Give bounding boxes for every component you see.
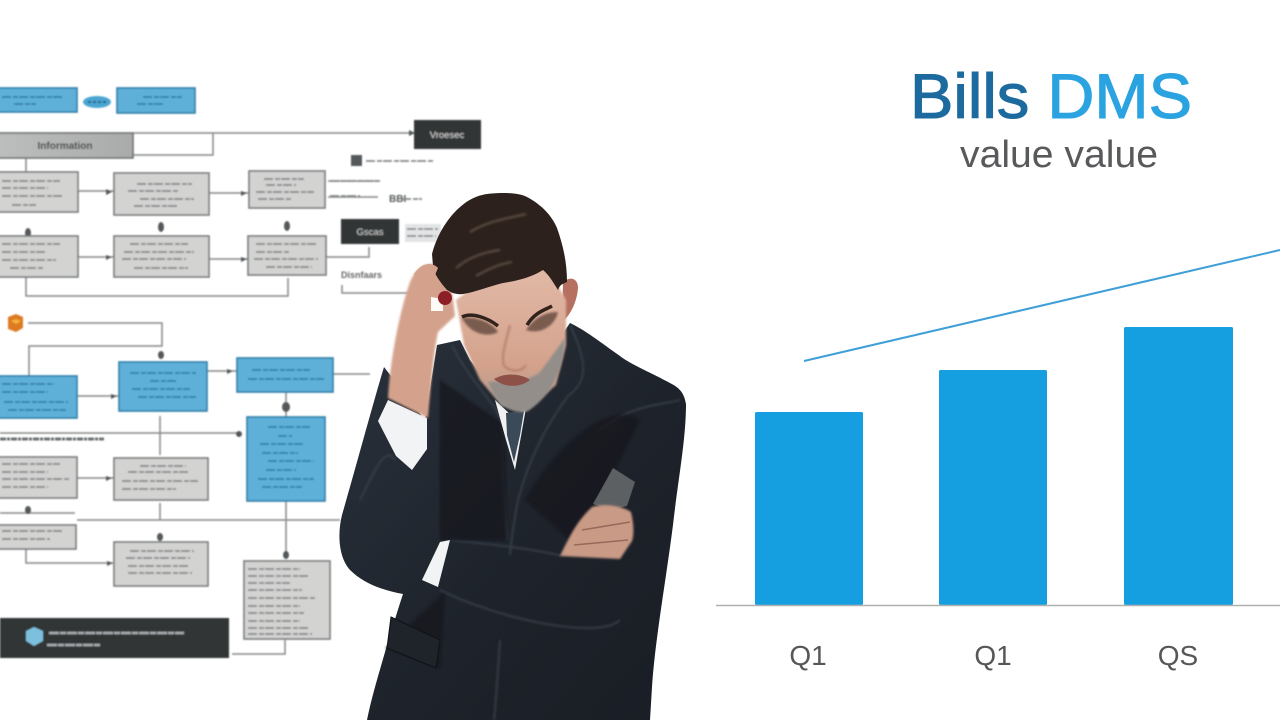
blue box top right <box>117 88 195 113</box>
dark box: status: Gscas <box>357 227 384 238</box>
flow box row 2 column 2 <box>114 236 209 277</box>
flow box row 1 column 2 <box>114 173 209 215</box>
dark box: status <box>341 219 399 244</box>
shirt collar and tie <box>495 400 526 470</box>
dark footer bar <box>0 618 229 658</box>
panel: flowchart diagram <box>0 88 481 658</box>
hair highlights <box>456 214 526 276</box>
face <box>456 262 566 411</box>
jacket shadows <box>385 380 640 668</box>
figure: worried businessman <box>339 193 686 720</box>
bar chart <box>716 250 1280 671</box>
heading: Bills DMS: Bills DMS <box>910 62 1192 132</box>
flow box row 5 column 2 <box>114 542 208 586</box>
gray header box: Information <box>38 141 92 152</box>
axis baseline <box>716 604 1280 606</box>
gap between fingers <box>431 297 443 311</box>
nose <box>503 325 526 371</box>
jacket highlights <box>360 325 680 720</box>
connector lines <box>0 130 415 654</box>
shirt cuff, crossed arm <box>422 540 450 587</box>
side notes <box>330 155 434 205</box>
caption line <box>0 438 104 440</box>
label note: Disnfaars <box>341 270 382 280</box>
ear <box>562 279 578 322</box>
suit jacket <box>339 323 686 720</box>
bar 3 <box>1124 327 1233 605</box>
gray note <box>405 224 441 242</box>
grey object in sleeve <box>593 468 635 510</box>
eyebrows <box>462 306 552 326</box>
flow box row 2 column 3 <box>248 236 326 275</box>
bar 2 <box>939 370 1047 605</box>
dark box: process <box>414 120 481 149</box>
blue box row 3 column 1 <box>0 376 77 418</box>
fingers on head <box>414 264 438 290</box>
icon: orange cube <box>8 314 23 332</box>
gray header box <box>0 133 133 158</box>
side notes: BBI <box>389 194 406 205</box>
lower hand <box>560 505 633 559</box>
blue box row 3 column 3 <box>237 358 333 392</box>
footer text <box>47 633 184 645</box>
icon: blue connector <box>83 96 111 108</box>
hand finger lines <box>574 522 630 545</box>
tall gray box <box>244 561 330 639</box>
axis labels <box>789 640 1198 671</box>
flow box row 1 column 1 <box>0 172 78 212</box>
bar 1 <box>755 412 863 605</box>
flow box row 4 column 1 <box>0 457 77 498</box>
title <box>910 62 1192 176</box>
hair <box>432 193 567 294</box>
flow box row 2 column 1 <box>0 236 78 277</box>
mouth <box>494 375 530 386</box>
flow box row 5 column 1 <box>0 525 76 549</box>
red object at temple <box>438 291 452 305</box>
subheading: value value <box>960 134 1158 176</box>
pocket flap <box>387 617 440 668</box>
icon: hexagon <box>26 627 43 646</box>
axis labels: Q1 <box>789 640 827 671</box>
tall blue box <box>247 417 325 501</box>
raised forearm and hand <box>388 264 455 418</box>
blue box top left <box>0 88 77 112</box>
axis labels: QS <box>1158 640 1198 671</box>
trend line <box>804 250 1280 361</box>
beard <box>488 338 565 412</box>
blue box row 3 column 2 <box>119 362 207 411</box>
axis labels: Q1 <box>974 640 1012 671</box>
eye shadows <box>462 312 558 335</box>
shirt cuff, raised arm <box>378 400 427 470</box>
flow box row 1 column 3 <box>249 171 325 208</box>
flow box row 4 column 2 <box>114 458 208 500</box>
dark box: process: Vroesec <box>430 130 464 141</box>
